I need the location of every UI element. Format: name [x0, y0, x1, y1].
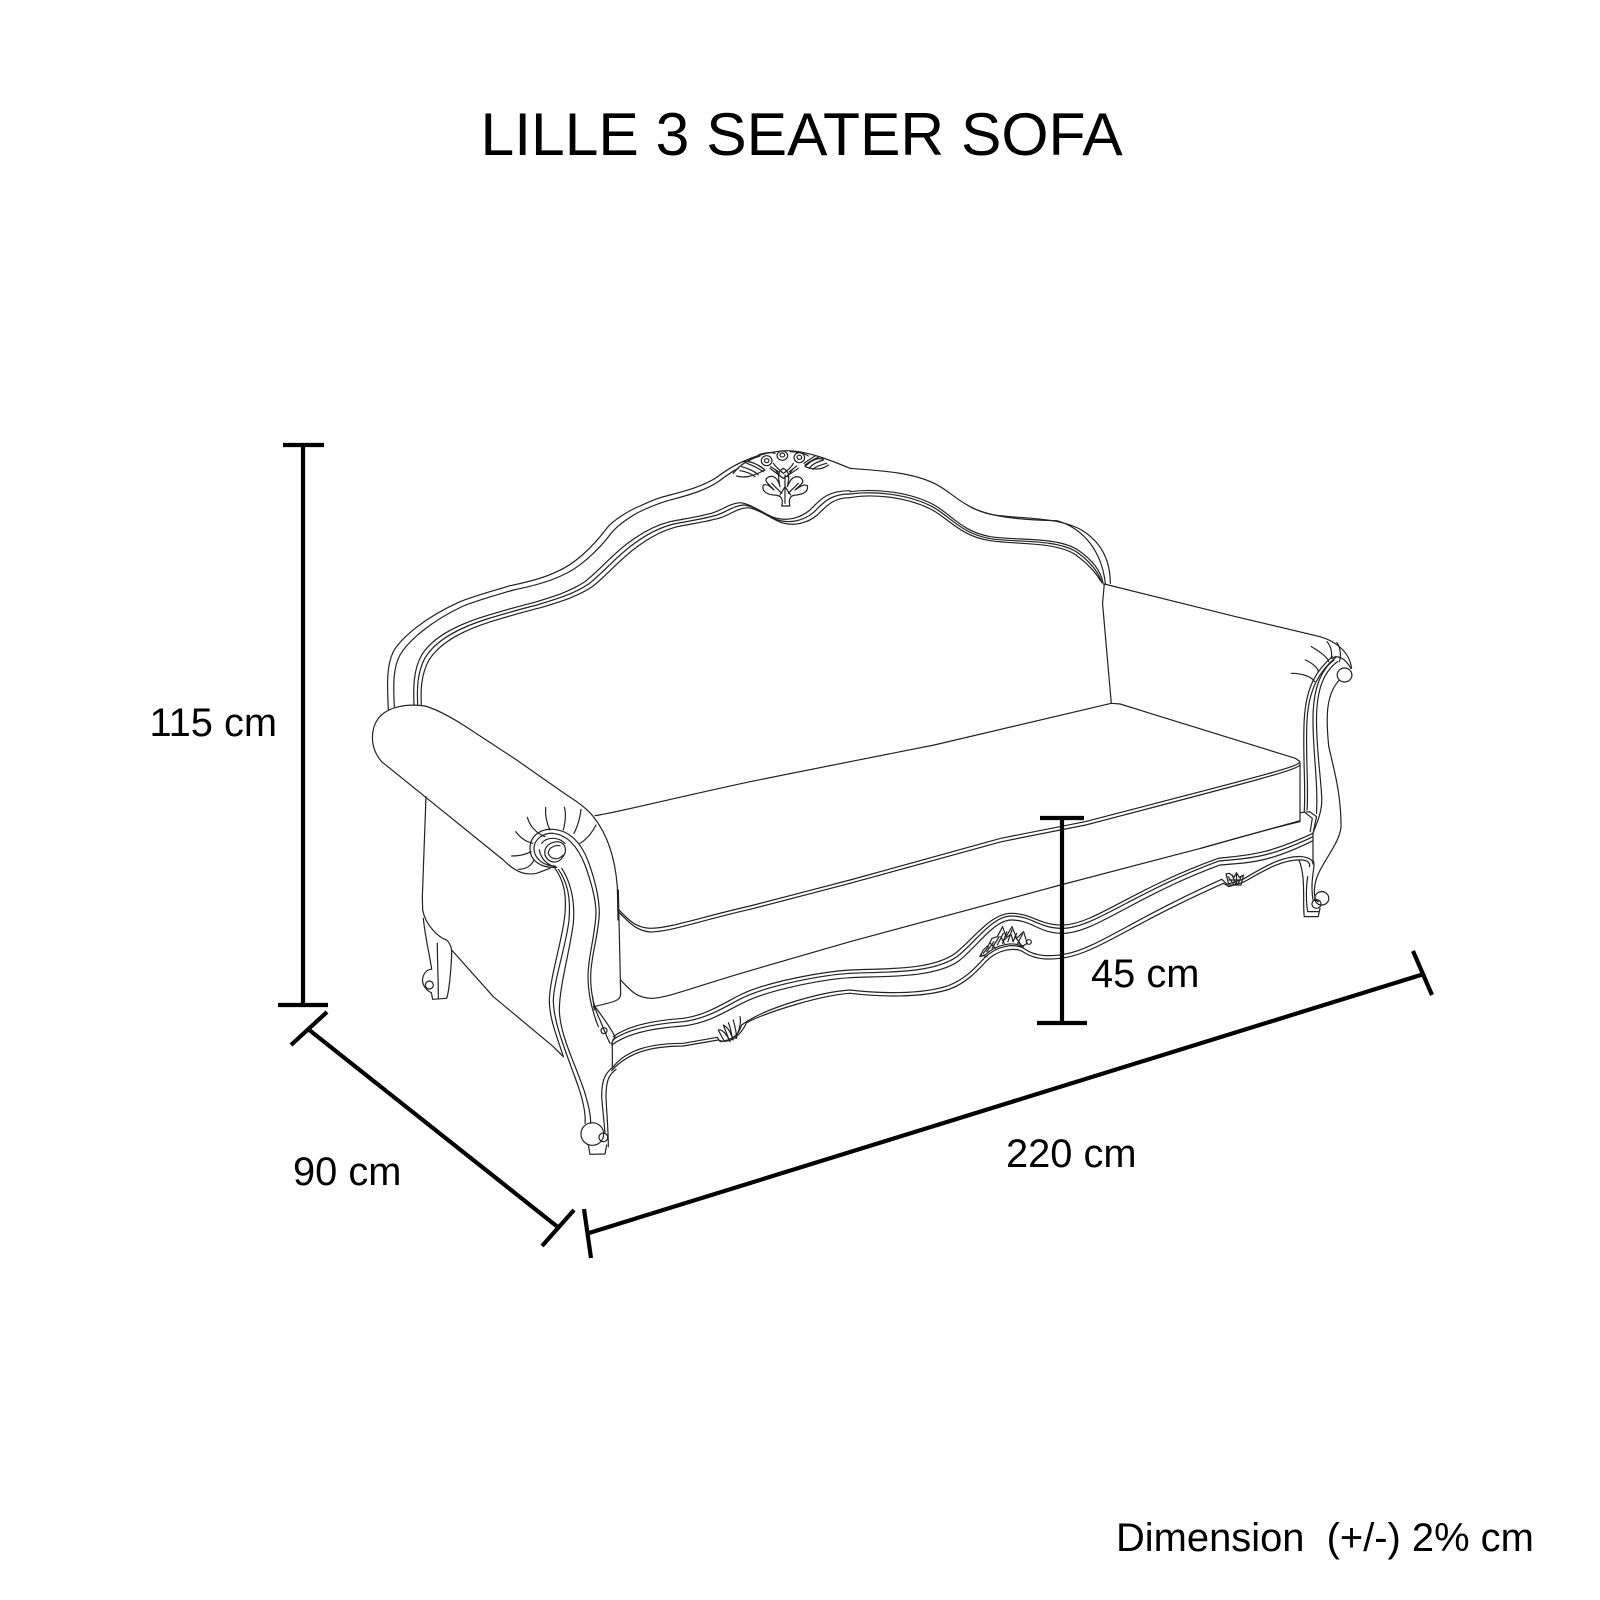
arm scroll rays — [512, 807, 596, 869]
arm scroll spiral — [530, 829, 610, 1043]
front rail left section — [612, 970, 850, 1071]
sofa line drawing — [372, 451, 1352, 1154]
dimension: height 115 cm — [278, 445, 328, 1005]
front left leg — [549, 868, 616, 1154]
right arm rays — [1291, 642, 1340, 682]
title: LILLE 3 SEATER SOFA — [480, 100, 1123, 168]
crown carving — [733, 451, 828, 506]
label: 90 cm: 90 cm — [293, 1150, 401, 1194]
sofa upper right: back rail, right arm and seat — [850, 468, 1352, 917]
sofa backrest left half and left arm — [372, 451, 850, 920]
centre rail carving — [980, 927, 1031, 957]
label: 115 cm: 115 cm — [150, 701, 277, 745]
left side panel and rear leg — [422, 797, 621, 1057]
right rail carving — [1226, 873, 1244, 885]
label: 220 cm: 220 cm — [1006, 1132, 1137, 1176]
sofa lower right: rail, carving and right leg — [850, 821, 1313, 996]
sofa lower left: scroll, legs, cushion and rail — [422, 797, 850, 1154]
label: 45 cm: 45 cm — [1091, 952, 1199, 996]
left arm roll — [372, 705, 550, 874]
dimension: depth 90 cm — [291, 1012, 574, 1246]
right arm scroll and leg — [1299, 657, 1352, 917]
seat cushion front — [618, 880, 850, 998]
dimension: seat height 45 cm — [1037, 818, 1087, 1023]
dimension: width 220 cm — [584, 951, 1432, 1258]
tolerance note: Dimension (+/-) 2% cm — [1116, 1516, 1534, 1560]
